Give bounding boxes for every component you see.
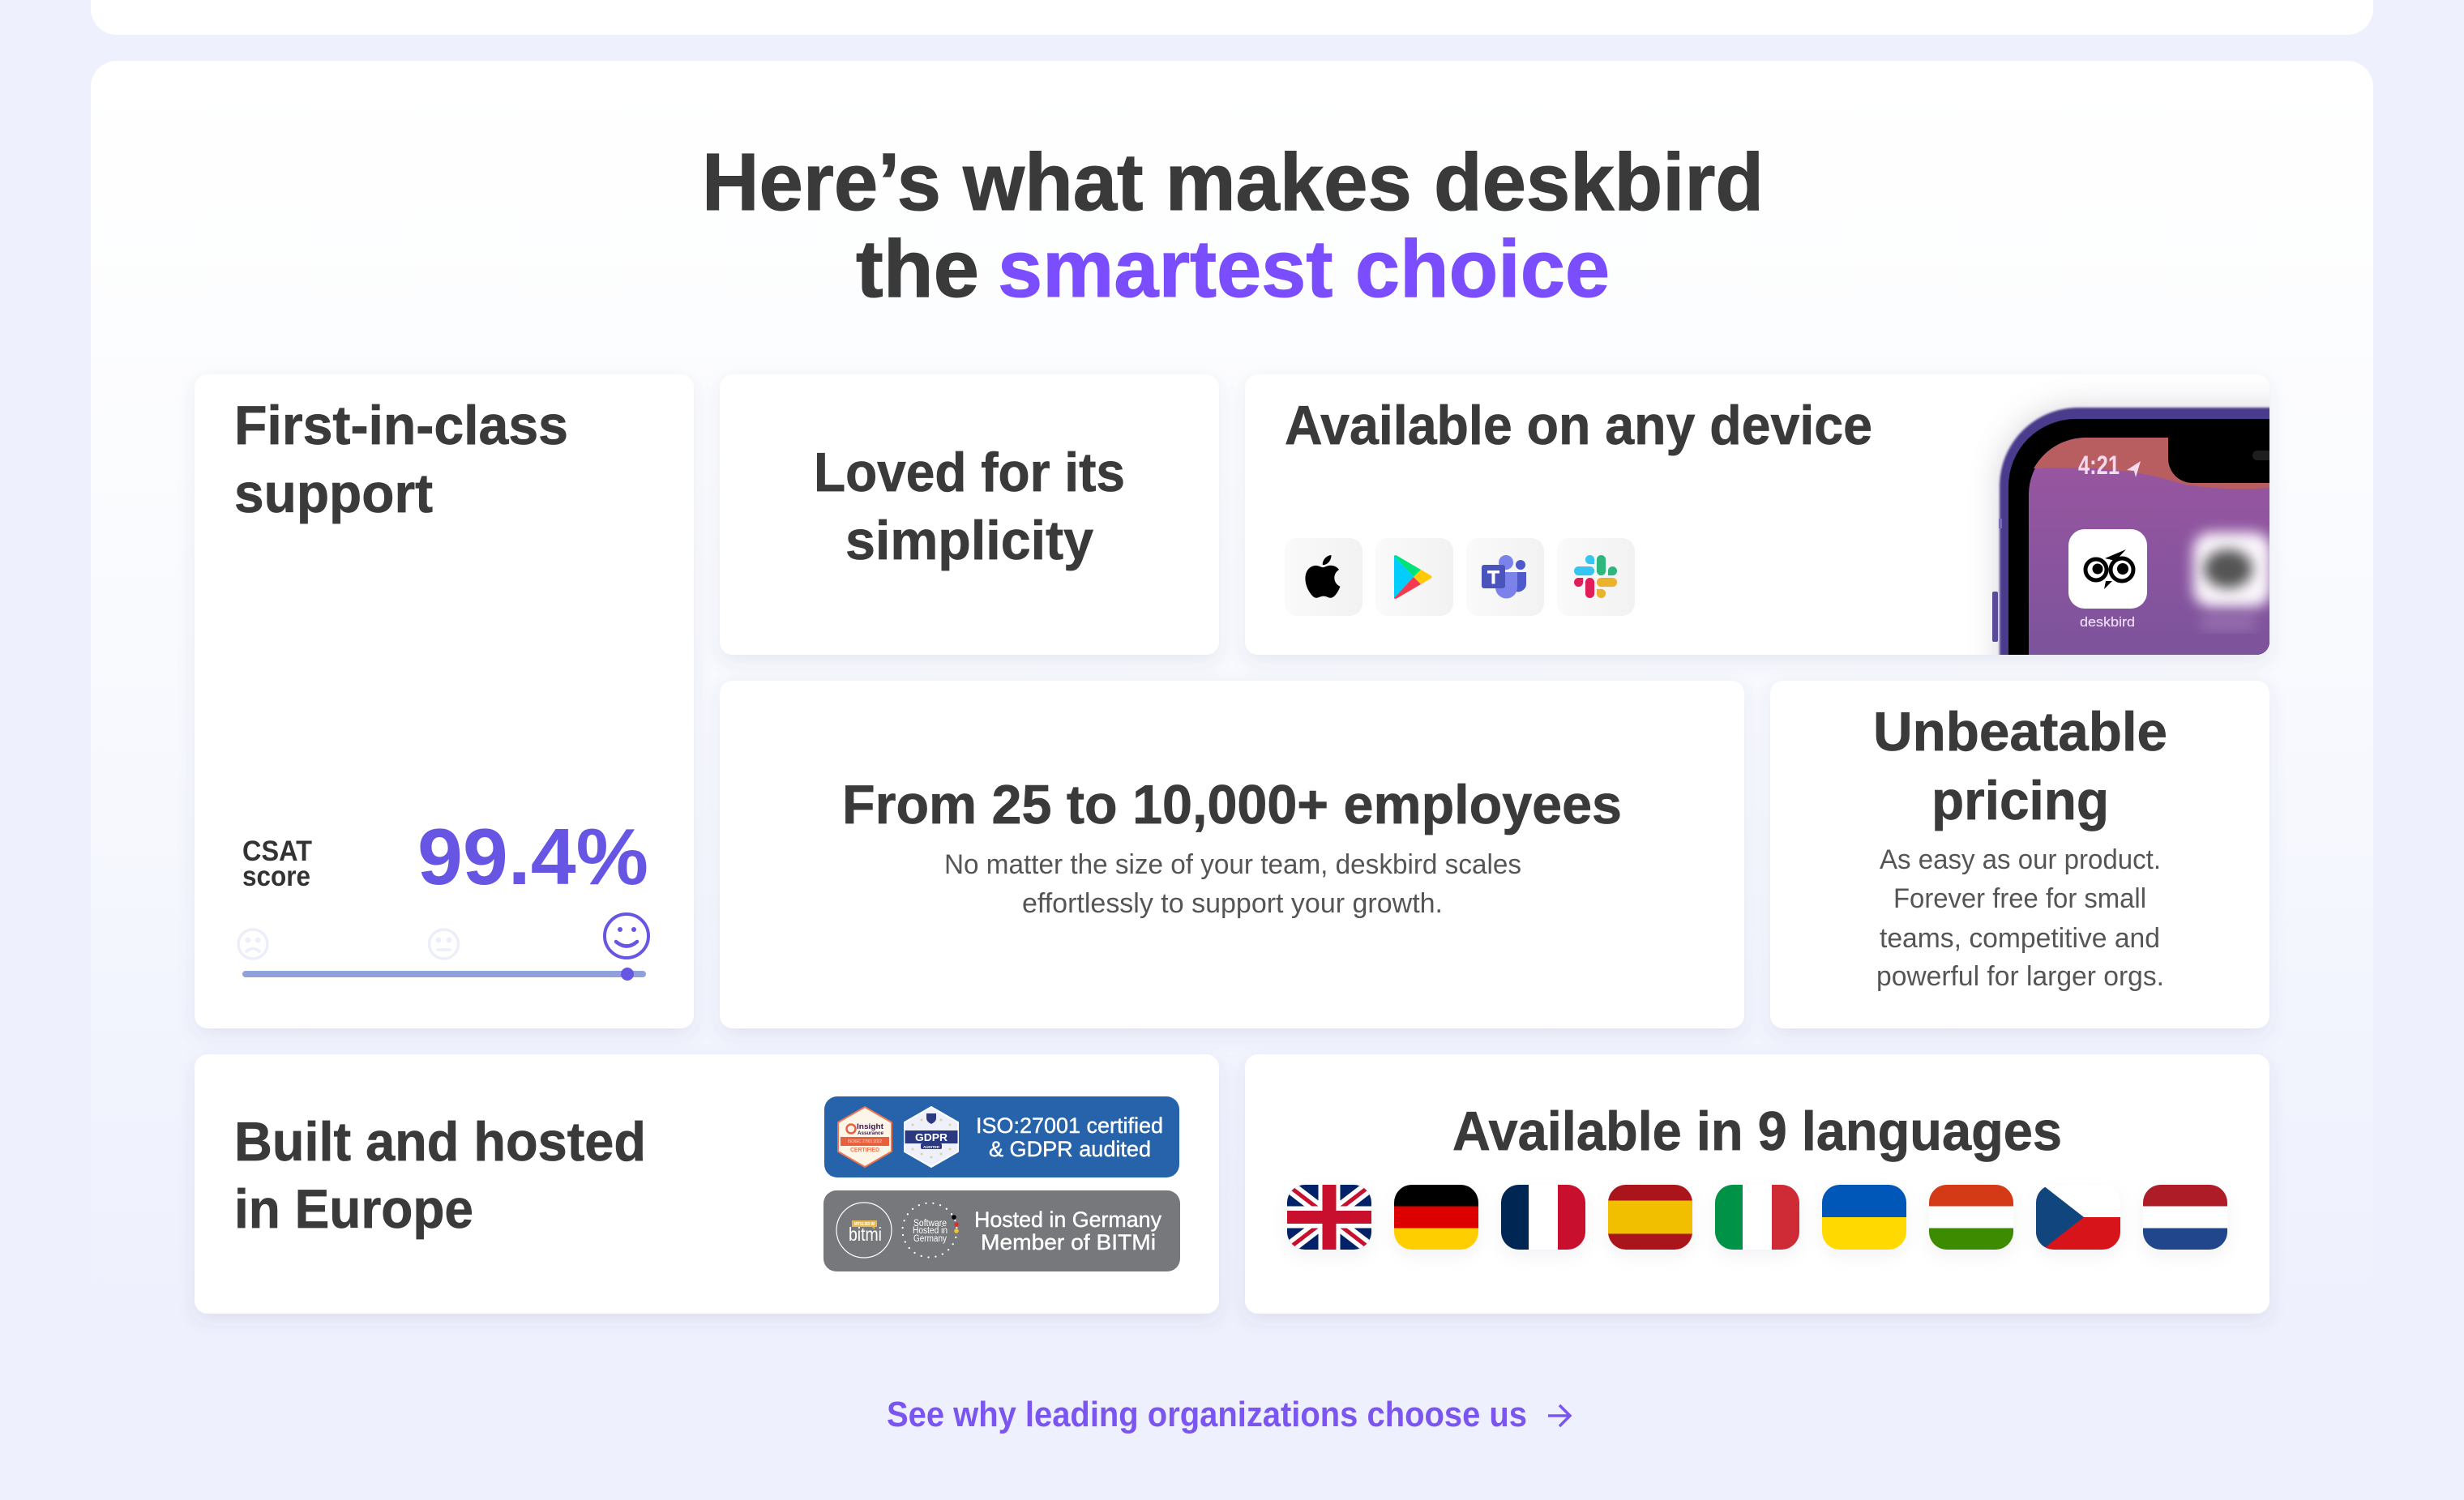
badge: hosted in Germany <box>823 1190 1180 1271</box>
body text: teams, competitive and <box>1880 923 2160 954</box>
heading: unbeatable pricing <box>1873 701 2167 831</box>
icon: microsoft teams <box>1466 538 1544 616</box>
title <box>702 137 1764 314</box>
icon: Insight Assurance hexagon: Insight <box>857 1122 883 1130</box>
card: unbeatable pricing <box>1770 681 2269 1028</box>
body text: As easy as our product. <box>1880 844 2161 875</box>
badge: ISO and GDPR <box>824 1096 1179 1177</box>
badge text <box>974 1207 1161 1254</box>
CSAT label: score <box>242 861 310 892</box>
blurred neighbouring app icon <box>2193 532 2271 629</box>
flag: Germany <box>1394 1185 1478 1250</box>
title: smartest choice <box>998 224 1610 314</box>
badge text: & GDPR audited <box>989 1137 1151 1161</box>
icon: Insight Assurance hexagon: ISO/IEC 27001:2022 <box>848 1139 882 1144</box>
heading: unbeatable pricing: pricing <box>1931 770 2109 831</box>
card: first-in-class support <box>195 374 694 1028</box>
heading: built and hosted in Europe: Built and hosted <box>234 1111 646 1173</box>
card: loved for its simplicity <box>720 374 1219 655</box>
phone mockup <box>1987 395 2269 655</box>
card: from 25 to 10,000+ employees: From 25 to 10,000+ employees <box>842 774 1622 835</box>
icon: apple <box>1285 538 1362 616</box>
icon: GDPR hexagon: AUDITED <box>923 1145 940 1149</box>
panel: previous section edge <box>91 0 2373 35</box>
icon: Insight Assurance hexagon: CERTIFIED <box>850 1147 879 1153</box>
card: available on any device <box>1245 396 2269 661</box>
heading: unbeatable pricing: Unbeatable <box>1873 701 2167 763</box>
card: loved for its simplicity: Loved for its <box>814 442 1125 503</box>
icon: arrow <box>1548 1405 1570 1426</box>
CSAT label <box>242 835 312 892</box>
icon: GDPR hexagon <box>905 1107 958 1167</box>
title: the <box>856 224 979 314</box>
body text: Forever free for small <box>1893 883 2146 914</box>
flag: Spain <box>1608 1185 1692 1250</box>
badge text: Hosted in Germany <box>974 1207 1161 1232</box>
icon: location arrow <box>2127 461 2141 477</box>
app label: deskbird <box>2080 614 2135 630</box>
body text: effortlessly to support your growth. <box>1022 888 1443 919</box>
badge text: Member of BITMi <box>981 1230 1156 1254</box>
icon: google play <box>1375 538 1453 616</box>
flag: Ukraine <box>1822 1185 1906 1250</box>
icon: slack <box>1557 538 1635 616</box>
icon: BITMi circle: MITGLIED IM <box>854 1222 875 1227</box>
icon: Insight Assurance hexagon <box>838 1107 892 1167</box>
body text: powerful for larger orgs. <box>1876 961 2164 992</box>
heading: first-in-class support: support <box>234 463 433 524</box>
title: Here’s what makes deskbird <box>702 137 1764 228</box>
icon: software hosted in Germany seal: Hosted in <box>913 1226 948 1236</box>
heading: first-in-class support <box>234 395 568 524</box>
CSAT value: 99.4% <box>417 812 648 901</box>
icon: BITMi circle: bitmi <box>849 1224 882 1245</box>
flag: France <box>1501 1185 1585 1250</box>
icon: GDPR hexagon: GDPR <box>915 1131 948 1143</box>
flag: Italy <box>1715 1185 1799 1250</box>
satisfaction slider <box>242 968 646 981</box>
heading: available in 9 languages: Available in 9 languages <box>1452 1100 2062 1162</box>
card: available in 9 languages <box>1245 1054 2269 1314</box>
app icon: deskbird owl <box>2068 529 2147 609</box>
icon: software hosted in Germany seal: Software <box>913 1219 947 1229</box>
heading: built and hosted in Europe: in Europe <box>234 1178 473 1240</box>
flag: Netherlands <box>2143 1185 2227 1250</box>
CSAT label: CSAT <box>242 835 312 867</box>
body text <box>944 849 1521 919</box>
call to action link: See why leading organizations choose us <box>887 1395 1527 1434</box>
body text: No matter the size of your team, deskbird scales <box>944 849 1521 880</box>
icon: happy face <box>605 914 648 958</box>
body text <box>1876 844 2164 992</box>
card: from 25 to 10,000+ employees <box>720 681 1744 1028</box>
icon: neutral face <box>430 929 459 959</box>
card: loved for its simplicity: simplicity <box>845 510 1093 571</box>
icon: sad face <box>238 929 267 959</box>
icon: BITMi circle <box>836 1203 892 1258</box>
icon: software hosted in Germany seal <box>903 1203 959 1258</box>
heading: first-in-class support: First-in-class <box>234 395 568 456</box>
flag: Czech Republic <box>2036 1186 2120 1253</box>
flag: United Kingdom <box>1287 1185 1371 1250</box>
heading: built and hosted in Europe <box>234 1111 646 1240</box>
flag: Hungary <box>1929 1185 2013 1250</box>
icon: Insight Assurance hexagon: Assurance <box>858 1131 884 1136</box>
heading: available on any device: Available on any device <box>1285 395 1872 456</box>
card: built and hosted in Europe <box>195 1054 1219 1314</box>
badge text: ISO:27001 certified <box>976 1113 1163 1138</box>
badge text <box>976 1113 1163 1161</box>
icon: software hosted in Germany seal: Germany <box>913 1234 947 1244</box>
status bar time: 4:21 <box>2078 451 2120 480</box>
